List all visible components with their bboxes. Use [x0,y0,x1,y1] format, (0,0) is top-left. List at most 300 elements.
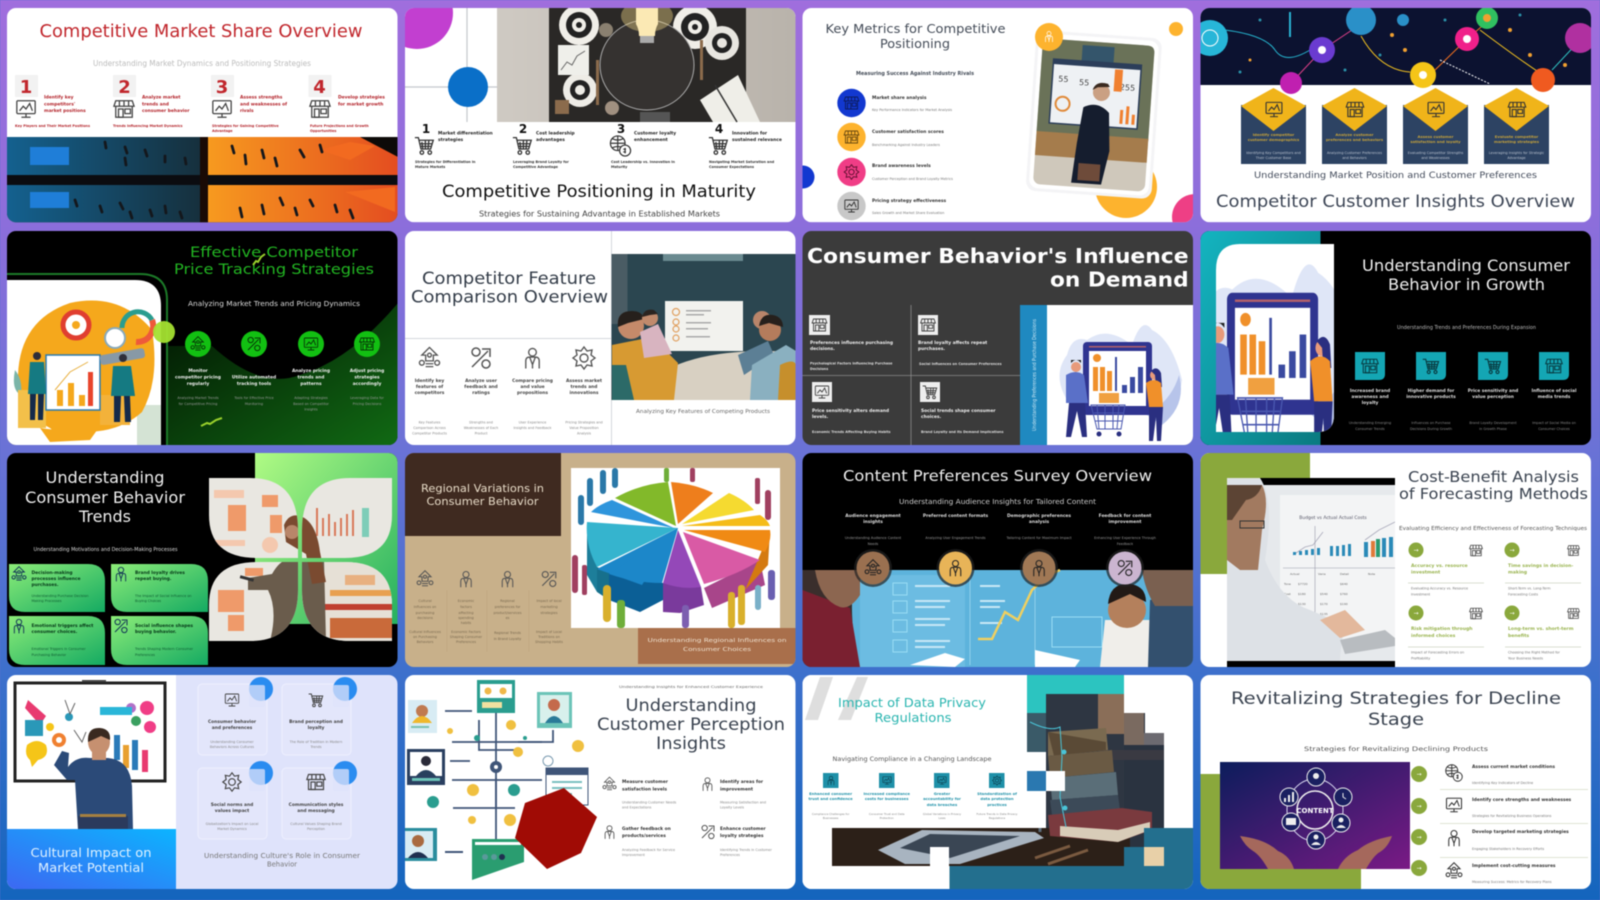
strategy 1: Identifying Key Indicators of Decline [1472,781,1533,785]
feature 4: Assess market [566,378,602,384]
panel: Cost-Benefit Analysis of Forecasting Methods [1200,453,1591,667]
title: Consumer Behavior [25,488,185,507]
title [807,244,1189,292]
step: analyze: Insights [304,408,318,412]
growth item 2: Influences on Purchase [1411,421,1451,425]
feature 4: trends and [571,384,597,390]
metric: market share: Key Performance Indicators for Market Analysis [872,108,952,112]
step 3: Advantage [212,129,233,133]
step 2: trends and [142,102,169,108]
title: Effective Competitor [190,245,358,261]
item 4: Consumer Expectations [709,165,754,169]
photo: analyst with budget chart: Detail [1340,572,1349,576]
item 2: 2 [519,122,527,136]
quadrant 3: Economic Trends Affecting Buying Habits [812,430,890,434]
subtitle: Understanding Market Position and Customer Preferences [1254,171,1537,181]
method: long-term: Long-term vs. short-term [1508,626,1574,632]
strategy 4 [1411,860,1556,884]
region 2: spending [458,616,474,620]
item 2: Leveraging Brand Loyalty for [513,160,569,164]
caption: Understanding Culture's Role in Consumer [204,852,360,860]
region 3: es [506,616,510,620]
feature 2 [464,348,498,436]
regulation 3: Greater [934,791,950,796]
method: accuracy: investment [1411,570,1441,576]
glass card 4: Cultural Values Shaping Brand [290,822,342,826]
title [1399,468,1588,503]
photo: analyst with budget chart: $7720 [1298,582,1308,586]
step 2: 2 [118,77,131,98]
panel: Regional Variations in Consumer Behavior [405,453,796,667]
feature 2: Product [475,432,488,436]
card 2: Analyze customer [1335,132,1374,137]
growth item 4: Consumer Choices [1538,427,1570,431]
metric: brand awareness: Customer Perception and Brand Loyalty Metrics [872,177,953,181]
glass card 4: Perception [307,827,325,831]
step 3: Strategies for Gaining Competitive [212,124,279,128]
insight 3: Analyzing Feedback for Service [622,848,675,852]
green outline [7,274,167,446]
strategy 3: → [1416,834,1422,841]
region 4: Impact of Local [536,630,562,634]
top caption: Understanding Insights for Enhanced Customer Experience [619,684,764,689]
step: adjust: Leveraging Data for [350,396,384,400]
growth item 2: innovative products [1406,394,1456,400]
quadrant 1 [809,315,893,371]
strategy 1: → [1416,771,1422,778]
title [826,21,1006,51]
title block [405,453,561,536]
card: social influence: Trends Shaping Modern Consumer [134,647,194,651]
card 3: satisfaction and loyalty [1410,139,1461,144]
photo: analyst with budget chart: Actual [1290,572,1300,576]
caption block [638,628,796,664]
panel: Understanding Consumer Behavior in Growth [1196,231,1591,458]
method: long-term: Choosing the Right Method for [1508,650,1560,654]
title: Content Preferences Survey Overview [843,467,1152,485]
item 1: strategies [438,137,464,143]
method: time savings: Short-Term vs. Long-Term [1508,586,1551,590]
card 4: Advantage [1507,156,1526,160]
title: Insights [656,734,726,754]
regulation 2: costs for businesses [865,796,909,801]
feature 3 [512,348,553,430]
item 3: Customer loyalty [634,130,676,136]
quadrant 2 [918,315,1002,366]
step 3: 3 [216,77,228,98]
photo: analyst with budget chart: $135 [1320,612,1328,616]
regulation 4 [977,773,1018,820]
caption: Behavior [267,860,297,868]
quadrant 2: Brand loyalty affects repeat [918,340,987,346]
strategy 3 [1411,829,1569,851]
card: brand loyalty: repeat buying. [135,576,172,582]
insight 2: Measuring Satisfaction and [720,800,766,804]
strategy 1: Assess current market conditions [1472,764,1555,770]
method: long-term: Your Business Needs [1508,656,1543,660]
banner: network nodes [1192,5,1595,94]
insight 2: improvement [720,786,753,792]
photo petals: shopper with data [209,478,392,641]
quadrant 3: levels. [812,414,828,420]
region 4: Impact of local [536,599,562,603]
title block: Consumer Behavior [426,496,539,508]
step: automate: tracking tools [237,381,272,387]
title: Price Tracking Strategies [174,262,374,278]
step 4: 4 [313,77,326,98]
step 3 [211,75,287,133]
card: social influence: buying behavior. [135,629,177,635]
regulation 2: Increased compliance [863,791,910,796]
step: monitor: for Competitive Pricing [179,402,217,406]
panel: Effective Competitor Price Tracking Strategies [7,231,398,446]
photo: analyst with budget chart: Budget vs Actual Actual Costs [1299,515,1367,521]
region 2: Preferences [456,640,476,644]
panel: Competitor Customer Insights Overview [1192,5,1595,222]
caption block: Consumer Choices [683,647,751,653]
growth item 3 [1468,352,1518,431]
step: analyze: trends and [298,374,324,380]
glass card 2: loyalty [308,725,325,731]
insight 4: loyalty strategies [720,833,764,839]
card: brand loyalty: Brand loyalty drives [135,570,185,576]
photo: analyst with budget chart: Tops [1283,602,1291,606]
panel: Understanding Customer Perception Insights [405,675,796,889]
region 1: Cultural Influences [409,630,441,634]
region 3: Regional [500,599,515,603]
feature 2: Weaknesses of Each [464,426,498,430]
strategy 3: Engaging Stakeholders in Recovery Efforts [1472,847,1544,851]
caption block: Understanding Regional Influences on [648,638,786,644]
insight 2 [703,778,766,810]
mosaic squares [1124,828,1164,866]
step: monitor: regularly [187,381,209,387]
region 1: influences on [414,605,436,609]
feature 3: Compare pricing [512,378,553,384]
method: accuracy: Evaluating Accuracy vs. Resource [1411,586,1468,590]
method: accuracy: Accuracy vs. resource [1411,563,1468,569]
quadrant 1: decisions. [810,346,835,352]
title block: Regional Variations in [421,483,544,495]
item 4: Navigating Market Saturation and [709,160,775,164]
photo: analyst with budget chart: Total [1283,612,1291,616]
quotation marks [805,677,868,720]
survey item 4: Feedback for content [1099,513,1151,519]
glass card 1: and preferences [212,725,253,731]
vertical label bar [1020,305,1047,445]
region 1: purchasing [416,611,434,615]
glass card 4: Communication styles [289,802,344,808]
step 1: competitors' [44,102,75,108]
title: Understanding Consumer [1362,256,1570,275]
method: accuracy [1408,542,1484,596]
panel: Impact of Data Privacy Regulations [802,675,1194,889]
survey item 1: Understanding Audience Content [845,536,902,540]
item 4: Innovation for [732,130,768,136]
step 1: Identify key [44,94,74,100]
item 3: 3 [617,122,625,136]
growth item 3: value perception [1472,394,1514,400]
metric: customer satisfaction: Benchmarking Against Industry Leaders [872,143,940,147]
item 3: Cost Leadership vs. Innovation in [611,160,675,164]
glass card 4: and messaging [297,808,335,814]
card: decision-making: Decision-making [32,570,73,576]
photo: analyst with budget chart: $140 [1298,612,1306,616]
card: emotional triggers: Purchasing Behavior [32,653,67,657]
card: decision-making: purchases. [32,582,59,588]
card: emotional triggers: consumer choices. [32,629,78,635]
insight 1 [603,777,676,810]
photo: analyst with budget chart: $540 [1320,592,1328,596]
photo: analyst with budget chart [1227,478,1395,667]
insight 3: products/services [622,833,666,839]
teal blocks [1027,675,1124,713]
glass card 1: Behaviors Across Cultures [210,745,254,749]
glass card 2 [282,677,357,755]
card 4 [1484,88,1549,164]
axis lines [405,8,497,122]
title: Consumer Behavior's Influence [807,244,1189,268]
photo: analyst with budget chart: Note [1368,572,1375,576]
card: social influence: Preferences [135,653,155,657]
caption [204,852,360,868]
subtitle: Strategies for Revitalizing Declining Products [1304,745,1489,753]
step: monitor: Analyzing Market Trends [177,396,219,400]
card: decision-making [9,564,105,612]
step: monitor: competitor pricing [175,374,221,380]
growth item 1: awareness and [1351,394,1389,400]
feature 2: Analyze user [465,378,498,384]
photo: presenter at touchscreen [15,680,165,830]
title: Stage [1368,710,1424,730]
feature 2: feedback and [464,384,498,390]
card: emotional triggers: Emotional Triggers in Consumer [32,647,86,651]
title [838,696,986,725]
method: long-term [1504,606,1581,660]
quadrant 3: Price sensitivity alters demand [812,408,889,414]
step: analyze: Based on Competitor [293,402,330,406]
photo: analyst with budget chart: Tone [1283,582,1291,586]
item 1: Mature Markets [415,165,445,169]
title: Key Metrics for Competitive [826,21,1006,36]
photo: team at data board [802,570,1193,667]
quadrant 1: Psychological Factors Influencing Purchase [810,362,893,366]
regulation 1: Compliance Challenges for [812,812,850,816]
glass card 3: Market Dynamics [217,827,247,831]
photo: analyst with budget chart: $760 [1340,592,1348,596]
region 2 [450,572,483,644]
step: adjust: strategies [354,374,380,380]
strategy 1 [1411,764,1555,785]
panel: Consumer Behavior's Influence on Demand [802,231,1193,445]
step 2: consumer behavior [142,108,190,114]
title: Behavior in Growth [1388,275,1545,294]
step 4: for market growth [338,102,383,108]
region 2: Economic Factors [451,630,481,634]
photo: businessman with dashboard: 55 [1058,74,1069,84]
blue title block: Cultural Impact on [30,846,152,860]
region 2: factors [460,605,472,609]
card: emotional triggers [9,616,105,665]
blue title block [7,829,176,889]
step: automate: Utilize automated [232,374,276,380]
glass card 2: Brand perception and [289,719,343,725]
regulation 1: Businesses [823,816,839,820]
survey item 2: Preferred content formats [923,513,988,519]
image: content cycle held by hands: CONTENT [1296,807,1334,815]
illustration: team with charts [14,301,161,445]
card 2: Analyzing Customer Preferences [1327,151,1382,155]
step: analyze: patterns [300,381,322,387]
card 1: Identify competitor [1253,132,1294,137]
method: time savings: Forecasting Costs [1508,592,1538,596]
title [174,245,374,278]
feature 3: Insights and Feedback [514,426,552,430]
step 1: market positions [44,108,86,114]
title: Impact of Data Privacy [838,696,986,710]
region 3: product/services [493,611,522,615]
method: time savings: Time savings in decision- [1508,563,1573,569]
item 1 [415,122,493,169]
survey item 3: Tailoring Content for Maximum Impact [1005,536,1072,540]
step 4: Develop strategies [338,94,385,100]
photo: analyst with budget chart: $190 [1340,602,1348,606]
step: automate [232,331,276,406]
title: Customer Perception [597,715,785,735]
feature 1: competitors [415,390,445,396]
step: monitor [175,331,221,406]
step: analyze: Adapting Strategies [294,396,328,400]
title: Understanding [46,468,164,487]
item 2: Competitive Advantage [513,165,559,169]
glass card 2: The Role of Tradition in Modern [289,740,342,744]
regulation 1: trust and confidence [808,796,853,801]
region 2: Economic [458,599,474,603]
feature 1: features of [416,384,443,390]
feature 1: Key Features [419,421,441,425]
panel: Cultural Impact on Market Potential [7,675,398,889]
insight 4: Identifying Trends in Customer [720,848,772,852]
region 3 [493,572,522,641]
lime squiggles [201,254,265,426]
card 1 [1241,88,1306,164]
step 4: Future Projections and Growth [310,124,369,128]
photo: businessman with dashboard: 255 [1120,83,1135,93]
region 1: Behaviors [417,640,434,644]
region 4: Shopping Habits [535,640,563,644]
panel: Key Metrics for Competitive Positioning [802,7,1194,223]
region 1: on Purchasing [413,635,437,639]
metric: brand awareness: Brand awareness levels [872,163,931,169]
regulation 2: Consumer Trust and Data [869,812,905,816]
regulation 4: Regulations [989,816,1006,820]
feature 3: and value [520,384,545,390]
method: risk [1408,606,1484,660]
panel: Competitive Market Share Overview [7,8,398,223]
growth item 1: Understanding Emerging [1349,421,1391,425]
step 3: Assess strengths [240,94,283,100]
photo: analyst with budget chart: $170 [1320,602,1328,606]
photo: analyst with budget chart: $130 [1298,602,1306,606]
method: risk: Impact of Forecasting Errors on [1411,650,1464,654]
step: automate: Tools for Effective Price [233,396,274,400]
regulation 4: practices [987,802,1008,807]
quadrant 4: Social trends shape consumer [921,408,996,414]
panel: Competitive Positioning in Maturity [381,0,796,222]
feature 4: Analysis [577,432,591,436]
title: Competitive Market Share Overview [40,21,362,42]
card 1: customer demographics [1248,137,1300,142]
3D pie chart with figures [571,468,780,628]
insight 2: Loyalty Levels [720,806,744,810]
metric: pricing strategy: Sales Growth and Market Share Evaluation [872,211,944,215]
title: Competitor Feature [422,269,596,289]
photo: blue and orange peg wall [7,137,398,223]
subtitle: Analyzing Market Trends and Pricing Dynamics [188,300,360,308]
title: Comparison Overview [411,288,608,308]
insight 4: Enhance customer [720,826,766,832]
method: risk: informed choices [1411,633,1456,639]
region 1: decisions [417,616,433,620]
panel: Competitor Feature Comparison Overview [405,231,796,445]
insight 1: Understanding Customer Needs [622,800,676,804]
title: Revitalizing Strategies for Decline [1231,689,1561,709]
growth item 3: Price sensitivity and [1468,388,1518,394]
logo badge [1035,23,1063,51]
method: risk: → [1413,610,1419,617]
region 2: affecting [459,611,473,615]
title [597,696,785,754]
quadrant 4: Brand Loyalty and Its Demand Implications [921,430,1003,434]
region 1: Cultural [418,599,432,603]
card 3: Assess customer [1418,134,1454,139]
region 4: Traditions on [537,635,560,639]
photo: target board and lightbulb [497,0,796,122]
survey item 1: Needs [868,542,879,546]
card: brand loyalty: The Impact of Social Influence on [134,594,192,598]
glass card 1 [198,677,273,755]
survey item 1 [845,513,902,587]
region 3: in Brand Loyalty [494,637,521,641]
title [411,269,608,308]
region 2: habits [461,621,471,625]
step: monitor: Monitor [188,368,208,374]
decorative pink circle [404,7,454,50]
step: adjust: Pricing Decisions [353,402,382,406]
insight 2: Identify areas for [720,779,764,785]
title [25,468,185,526]
photo: meeting room [612,254,796,400]
regulation 3: Laws [938,816,946,820]
glass card 4 [282,761,357,839]
step 2: Trends Influencing Market Dynamics [113,124,183,128]
card 2: preferences and behaviors [1326,137,1384,142]
card: brand loyalty: Buying Choices [135,599,161,603]
photo: laptop and books [832,694,1164,866]
method: long-term: benefits [1508,633,1529,639]
item 2: advantages [536,137,565,143]
subtitle: Evaluating Efficiency and Effectiveness of Forecasting Techniques [1399,526,1587,532]
step 1 [15,75,90,128]
subtitle: Strategies for Sustaining Advantage in Established Markets [479,210,720,218]
item 3: Maturity [611,165,628,169]
quadrant 2: purchases. [918,346,945,352]
card 2: and Behaviors [1342,156,1367,160]
title [1362,256,1570,294]
panel: Content Preferences Survey Overview [802,453,1193,667]
item 4 [709,122,782,169]
growth item 4: media trends [1538,394,1571,400]
